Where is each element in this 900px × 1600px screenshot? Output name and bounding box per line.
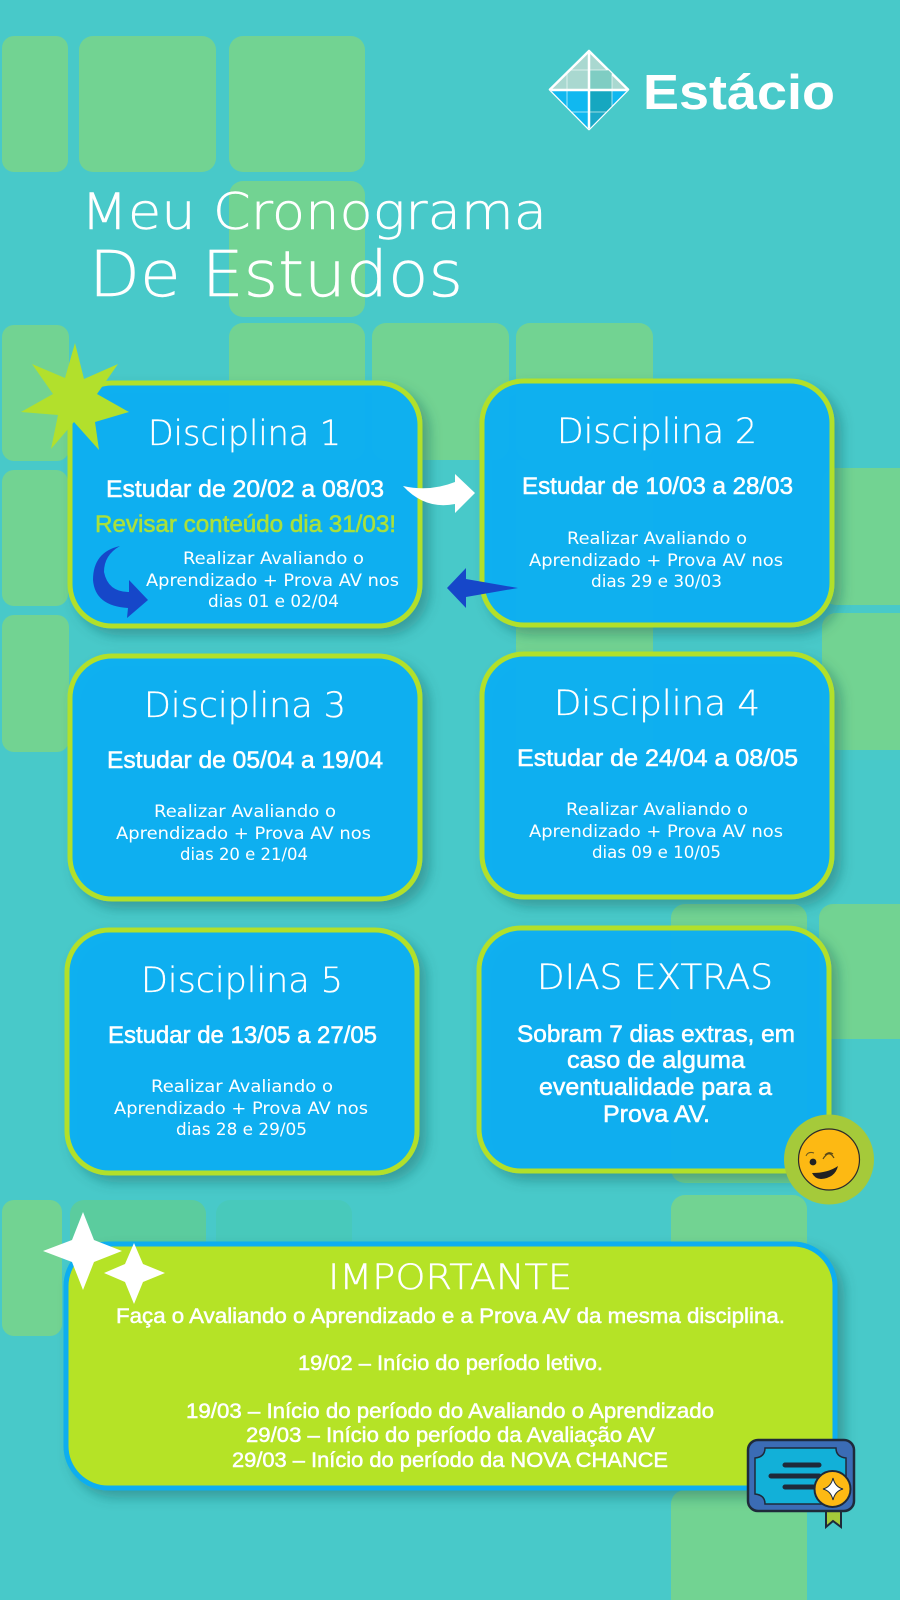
panel: Disciplina 4	[482, 654, 832, 897]
important dates text: Faça o Avaliando o Aprendizado e a Prova AV da mesma disciplina.	[116, 1305, 785, 1328]
exam text	[529, 800, 783, 862]
exam text: Realizar Avaliando o	[567, 529, 747, 548]
exam text: Realizar Avaliando o	[151, 1077, 333, 1096]
exam text: dias 28 e 29/05	[176, 1120, 307, 1139]
exam text: dias 20 e 21/04	[180, 845, 308, 864]
review note: Revisar conteúdo dia 31/03!	[95, 511, 396, 538]
icon: white sparkles	[43, 1212, 165, 1304]
panel: Dias Extras	[479, 928, 829, 1171]
exam text: dias 09 e 10/05	[592, 843, 721, 862]
icon: winking smiley	[784, 1114, 874, 1204]
important dates text: 19/03 – Início do período do Avaliando o Aprendizado	[186, 1400, 714, 1423]
study dates: Estudar de 20/02 a 08/03	[106, 476, 384, 503]
heading: Disciplina 5: Disciplina 5	[141, 961, 343, 1001]
icon: certificate	[748, 1440, 854, 1527]
panel: Disciplina 1	[70, 383, 420, 626]
study dates: Estudar de 13/05 a 27/05	[108, 1022, 377, 1049]
heading: Dias Extras: DIAS EXTRAS	[537, 958, 773, 998]
exam text	[529, 529, 783, 591]
exam text: Aprendizado + Prova AV nos	[116, 824, 371, 843]
title	[81, 183, 547, 311]
exam text: Aprendizado + Prova AV nos	[529, 822, 783, 841]
arrow: blue left	[447, 568, 518, 608]
extra days text: eventualidade para a	[539, 1074, 773, 1101]
logo wordmark: Estácio	[643, 66, 835, 120]
arrow: blue curved	[93, 546, 148, 618]
important dates text: 19/02 – Início do período letivo.	[298, 1352, 603, 1375]
exam text: Realizar Avaliando o	[566, 800, 748, 819]
heading: Disciplina 3: Disciplina 3	[144, 686, 346, 726]
exam text: Aprendizado + Prova AV nos	[114, 1099, 368, 1118]
exam text: Realizar Avaliando o	[154, 802, 336, 821]
title: De Estudos	[89, 238, 463, 311]
title: Meu Cronograma	[81, 183, 547, 241]
logo: Estácio	[540, 50, 835, 135]
exam text: dias 01 e 02/04	[208, 592, 339, 611]
exam text	[114, 1077, 368, 1139]
exam text: Aprendizado + Prova AV nos	[146, 571, 399, 590]
extra days text: Sobram 7 dias extras, em	[517, 1021, 795, 1048]
extra days text: caso de alguma	[567, 1047, 746, 1074]
important dates text	[116, 1305, 785, 1472]
exam text	[116, 802, 371, 864]
panel: Importante	[66, 1244, 835, 1488]
heading: Disciplina 4: Disciplina 4	[554, 684, 760, 724]
study dates: Estudar de 10/03 a 28/03	[522, 473, 793, 500]
study dates: Estudar de 05/04 a 19/04	[107, 747, 383, 774]
extra days text: Prova AV.	[603, 1101, 710, 1128]
extra days text	[517, 1021, 795, 1128]
heading: Disciplina 2: Disciplina 2	[557, 412, 757, 452]
panel: Disciplina 5	[67, 930, 417, 1173]
panel: Disciplina 2	[482, 381, 832, 625]
panel: Disciplina 3	[70, 656, 420, 899]
important dates text: 29/03 – Início do período da NOVA CHANCE	[232, 1449, 668, 1472]
heading: Disciplina 1: Disciplina 1	[148, 414, 341, 454]
exam text: dias 29 e 30/03	[591, 572, 722, 591]
heading: Importante: IMPORTANTE	[328, 1258, 572, 1298]
exam text: Aprendizado + Prova AV nos	[529, 551, 783, 570]
exam text	[146, 549, 399, 611]
icon: lime star	[21, 343, 129, 450]
exam text: Realizar Avaliando o	[183, 549, 364, 568]
icon: diamond logo	[548, 50, 630, 130]
study dates: Estudar de 24/04 a 08/05	[517, 745, 798, 772]
arrow: white right	[403, 474, 475, 513]
important dates text: 29/03 – Início do período da Avaliação AV	[246, 1424, 655, 1447]
